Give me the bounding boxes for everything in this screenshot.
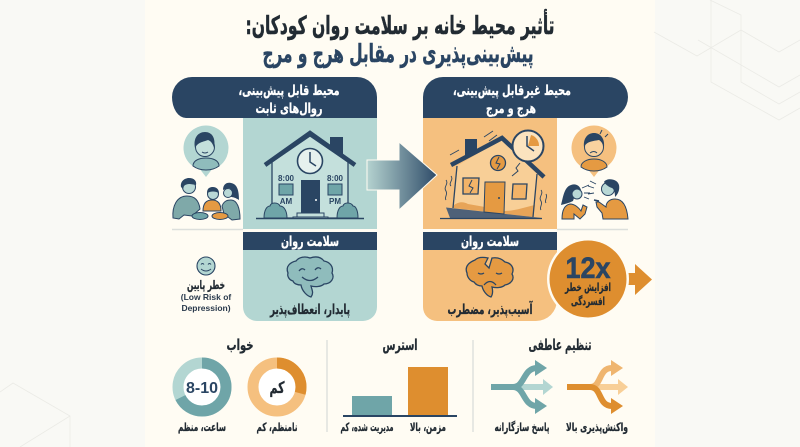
heading: stress: استرس <box>382 336 418 354</box>
header: chaotic: محیط غیرقابل پیش‌بینی، <box>453 83 571 99</box>
donut: low: کم <box>270 378 285 397</box>
callout: 12x risk: افزایش خطر <box>564 281 611 294</box>
arrow: transition <box>367 142 437 210</box>
text: stable resilient: پایدار، انعطاف‌پذیر <box>269 302 350 318</box>
band: mental health (stable) <box>243 232 377 250</box>
icon: stable house: PM <box>329 197 341 206</box>
icon: family meal <box>173 178 240 220</box>
title: تأثیر محیط خانه بر سلامت روان کودکان: <box>246 9 554 41</box>
header: predictable: روال‌های ثابت <box>256 101 322 117</box>
label: adaptive response: پاسخ سازگارانه <box>494 420 550 434</box>
label: chronic high: مزمن، بالا <box>410 420 446 434</box>
icon: orange branching arrows <box>567 360 628 414</box>
text: low risk: خطر پایین <box>187 278 225 292</box>
band: mental health (stable): سلامت روان <box>281 234 339 250</box>
label: regular hours: ساعت، منظم <box>178 420 226 434</box>
callout: 12x risk <box>547 238 652 320</box>
panel: stress <box>340 336 457 434</box>
icon: teal branching arrows <box>491 360 553 414</box>
panel: emotion regulation <box>491 336 628 435</box>
icon: calm child bubble <box>184 126 228 177</box>
bar chart <box>343 367 457 416</box>
title: پیش‌بینی‌پذیری در مقابل هرج و مرج <box>262 39 534 69</box>
callout: 12x risk: 12x <box>566 252 611 285</box>
band: mental health (vulnerable) <box>423 232 557 250</box>
label: managed low: مدیریت شده، کم <box>340 420 394 434</box>
icon: stable house: 8:00 <box>327 174 344 183</box>
heading: emotion regulation: تنظیم عاطفی <box>528 336 592 354</box>
text: vulnerable anxious: آسیب‌پذیر، مضطرب <box>448 300 533 318</box>
panel: sleep <box>178 336 301 434</box>
icon: stable house <box>256 133 364 218</box>
panel: chaotic environment <box>423 77 628 321</box>
band: mental health (vulnerable): سلامت روان <box>461 234 519 250</box>
header: chaotic: هرج و مرج <box>486 101 536 117</box>
title <box>246 9 554 69</box>
label: irregular low: نامنظم، کم <box>256 420 298 434</box>
callout: 12x risk: افسردگی <box>571 295 605 308</box>
icon: upset child bubble <box>572 126 616 177</box>
heading: sleep: خواب <box>226 336 254 354</box>
panel: predictable environment <box>172 77 377 321</box>
text: low risk: (Low Risk of <box>181 292 231 302</box>
text: low risk <box>181 278 231 313</box>
icon: stable house: AM <box>280 197 293 206</box>
header: predictable: محیط قابل پیش‌بینی، <box>238 83 340 99</box>
icon: tilted house <box>440 130 547 218</box>
icon: broken brain <box>466 257 513 297</box>
header: chaotic <box>423 77 628 118</box>
text: low risk: Depression) <box>181 303 231 313</box>
label: high reactivity: واکنش‌پذیری بالا <box>566 420 628 435</box>
icon: low-risk smiley <box>197 257 215 275</box>
icon: arguing parents <box>561 179 628 219</box>
icon: happy brain <box>287 257 333 297</box>
header: predictable <box>172 77 377 118</box>
icon: stable house: 8:00 <box>278 174 295 183</box>
donut: 8-10 hours: 8-10 <box>186 380 218 397</box>
divider lines <box>327 340 473 432</box>
